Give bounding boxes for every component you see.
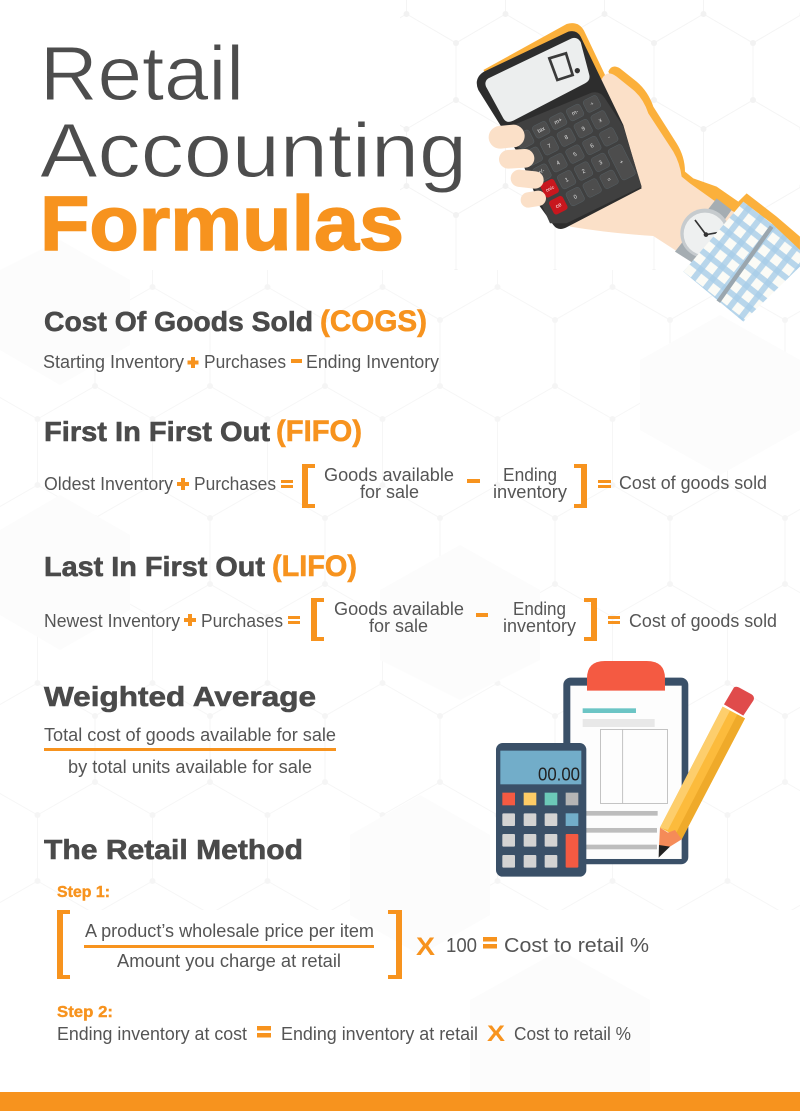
heading: First In First Out: First In First Out — [44, 416, 270, 447]
title — [40, 31, 467, 267]
formula: Step 1: 100 — [446, 935, 477, 957]
formula: Step 1 — [57, 910, 649, 979]
formula: Step 1: Amount you charge at retail — [117, 951, 341, 971]
section: COGS — [43, 305, 439, 372]
formula: FIFO: Oldest Inventory — [44, 474, 173, 494]
calculator keys: 5 — [573, 152, 578, 158]
formula: FIFO — [44, 464, 767, 508]
clipboard — [563, 661, 688, 864]
calculator keys: m+ — [554, 117, 564, 126]
section: LIFO — [44, 550, 777, 641]
formula: Weighted Average — [44, 725, 336, 777]
shirt cuff — [683, 202, 800, 322]
formula: Step 1: X — [416, 933, 435, 961]
formula: LIFO: inventory — [503, 616, 576, 636]
heading: Last In First Out — [44, 550, 357, 583]
calculator keys: ÷ — [590, 101, 595, 108]
formula: LIFO: Purchases — [201, 611, 283, 631]
calculator keys: - — [607, 135, 612, 141]
calculator keys: on/c — [545, 184, 556, 193]
calculator keys: 2 — [581, 169, 587, 175]
calculator keys: = — [607, 176, 613, 184]
small calculator: 00.00 — [538, 763, 580, 784]
heading: Last In First Out: (LIFO) — [272, 550, 357, 583]
section: The Retail Method — [44, 834, 649, 1046]
formula: LIFO: Newest Inventory — [44, 611, 180, 631]
calculator keys: 7 — [547, 143, 553, 150]
fingers — [500, 136, 538, 200]
formula: Step 2: Ending inventory at retail — [281, 1024, 478, 1044]
formula: FIFO: inventory — [493, 482, 567, 502]
formula: LIFO — [44, 598, 777, 641]
illustration: clipboard, calculator and pencil — [496, 661, 754, 877]
formula: FIFO: Cost of goods sold — [619, 473, 767, 493]
calculator keys: 6 — [590, 143, 595, 150]
calculator keys: 0 — [573, 194, 578, 201]
heading: Cost Of Goods Sold: (COGS) — [320, 305, 427, 338]
calculator keys: 3 — [598, 160, 604, 167]
watch — [675, 198, 732, 263]
formula: LIFO: for sale — [369, 616, 428, 636]
pencil — [659, 687, 754, 858]
formula: FIFO: Purchases — [194, 474, 276, 494]
formula: COGS: Purchases — [204, 352, 286, 372]
calculator keys — [514, 94, 636, 216]
calculator keys: 9 — [581, 126, 586, 133]
calculator body — [477, 31, 642, 229]
calculator keys: + — [619, 159, 625, 166]
title: Formulas — [40, 181, 404, 267]
formula: Step 1: Cost to retail % — [504, 934, 649, 957]
calculator keys: 1 — [564, 177, 570, 184]
illustration: hand holding calculator — [477, 23, 800, 322]
formula: COGS — [43, 352, 439, 372]
heading: Last In First Out: Last In First Out — [44, 551, 265, 582]
formula: COGS: Starting Inventory — [43, 352, 184, 372]
heading: The Retail Method: The Retail Method — [44, 834, 303, 865]
heading: Cost Of Goods Sold — [44, 305, 427, 338]
formula: FIFO: Goods available — [324, 465, 454, 485]
footer bar — [0, 1092, 800, 1111]
formula: LIFO: Goods available — [334, 599, 464, 619]
formula: Weighted Average: Total cost of goods available for sale — [44, 725, 336, 745]
calculator display: 0. — [549, 53, 580, 80]
heading: First In First Out — [44, 415, 362, 448]
calculator keys: +/- — [537, 168, 546, 176]
calculator keys: 4 — [556, 160, 561, 167]
calculator keys: ce — [555, 202, 563, 210]
calculator keys: x — [598, 117, 603, 124]
formula: COGS: Ending Inventory — [306, 352, 439, 372]
label: Step 1: Step 1: — [57, 884, 110, 901]
title: Accounting — [40, 108, 467, 194]
section: FIFO — [44, 415, 767, 508]
label: Step 2: Step 2: — [57, 1004, 113, 1021]
section: Weighted Average — [44, 681, 336, 777]
heading: First In First Out: (FIFO) — [276, 415, 362, 448]
calculator keys: tax — [537, 126, 546, 135]
formula: LIFO: Ending — [513, 599, 566, 619]
formula: FIFO: Ending — [503, 465, 557, 485]
formula: Step 2: Cost to retail % — [514, 1024, 631, 1044]
formula: Step 1: A product’s wholesale price per item — [85, 921, 374, 941]
heading: Weighted Average: Weighted Average — [44, 681, 316, 712]
formula: Step 2 — [57, 1021, 631, 1046]
formula: Step 2: X — [487, 1021, 505, 1046]
formula: LIFO: Cost of goods sold — [629, 611, 777, 631]
formula: FIFO: for sale — [360, 482, 419, 502]
small calculator — [496, 743, 586, 877]
calculator keys: m- — [571, 109, 580, 117]
calculator keys: . — [591, 186, 595, 192]
title: Retail — [40, 31, 244, 117]
formula: Weighted Average: by total units available for sale — [68, 757, 312, 777]
heading: Cost Of Goods Sold: Cost Of Goods Sold — [44, 306, 313, 337]
calculator keys: 8 — [564, 135, 570, 141]
formula: Step 2: Ending inventory at cost — [57, 1024, 247, 1044]
